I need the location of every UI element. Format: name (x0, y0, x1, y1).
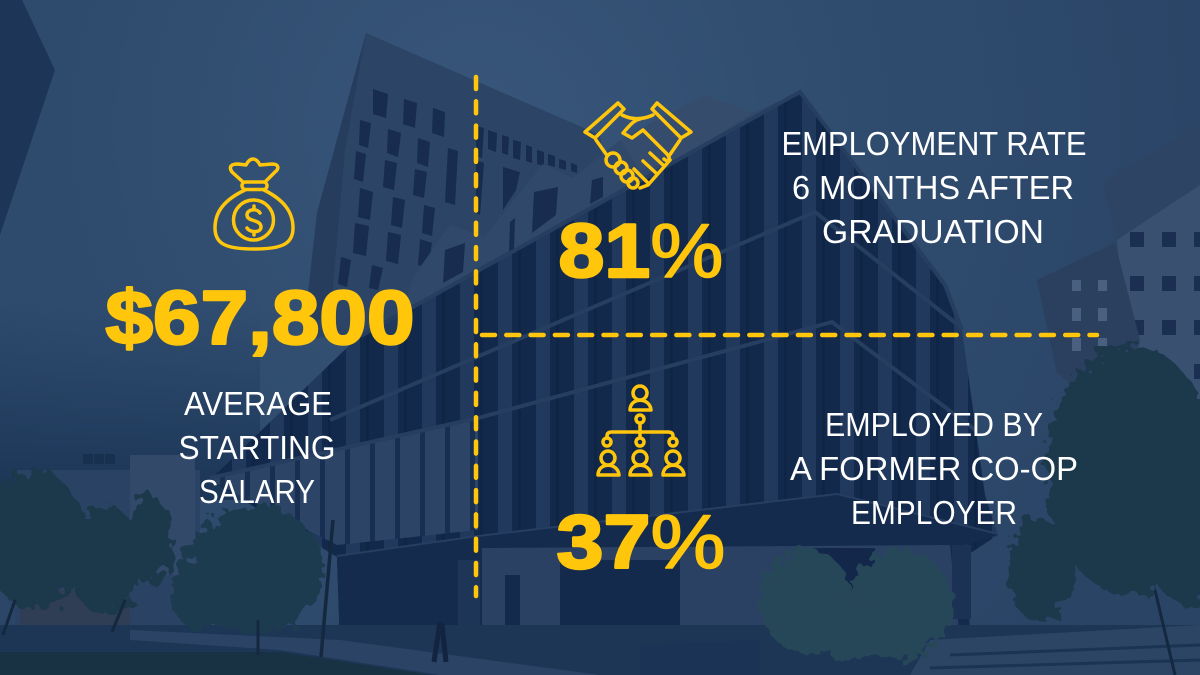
icon: handshake (585, 103, 691, 188)
label: employment rate: GRADUATION (822, 213, 1044, 250)
ground floor (337, 495, 998, 650)
ground and lawn (0, 625, 1200, 675)
left dark tower edge (0, 0, 55, 235)
label: average starting salary: STARTING (178, 429, 336, 466)
label: average starting salary: AVERAGE (184, 385, 332, 422)
icon: org chart (598, 386, 684, 475)
stone mid block (400, 92, 800, 320)
trees (0, 345, 1200, 660)
label: average starting salary: SALARY (199, 473, 315, 510)
label: employment rate: 6 MONTHS AFTER (792, 169, 1074, 206)
label: employed by a former co-op employer: A FORMER CO-OP (790, 450, 1078, 487)
label: average starting salary (178, 385, 336, 510)
tower block (300, 33, 620, 340)
label: employed by a former co-op employer: EMPLOYER (851, 494, 1017, 531)
dashed horizontal divider (482, 333, 1097, 337)
label: employed by a former co-op employer (790, 406, 1078, 531)
low left buildings (15, 454, 200, 635)
glass curtain wall (210, 92, 998, 645)
label: employment rate: EMPLOYMENT RATE (782, 125, 1086, 162)
label: employed by a former co-op employer: EMPLOYED BY (825, 406, 1043, 443)
right apartment buildings (1037, 123, 1200, 420)
stat: 37%: 37% (556, 500, 726, 585)
icon: money bag (215, 159, 293, 249)
dashed vertical divider (474, 77, 478, 596)
stat: 81%: 81% (558, 209, 724, 294)
tree trunks and lamp post (3, 520, 1175, 675)
pedestrian (434, 622, 446, 662)
stat: $67,800: $67,800 (106, 276, 414, 361)
label: employment rate (782, 125, 1086, 250)
